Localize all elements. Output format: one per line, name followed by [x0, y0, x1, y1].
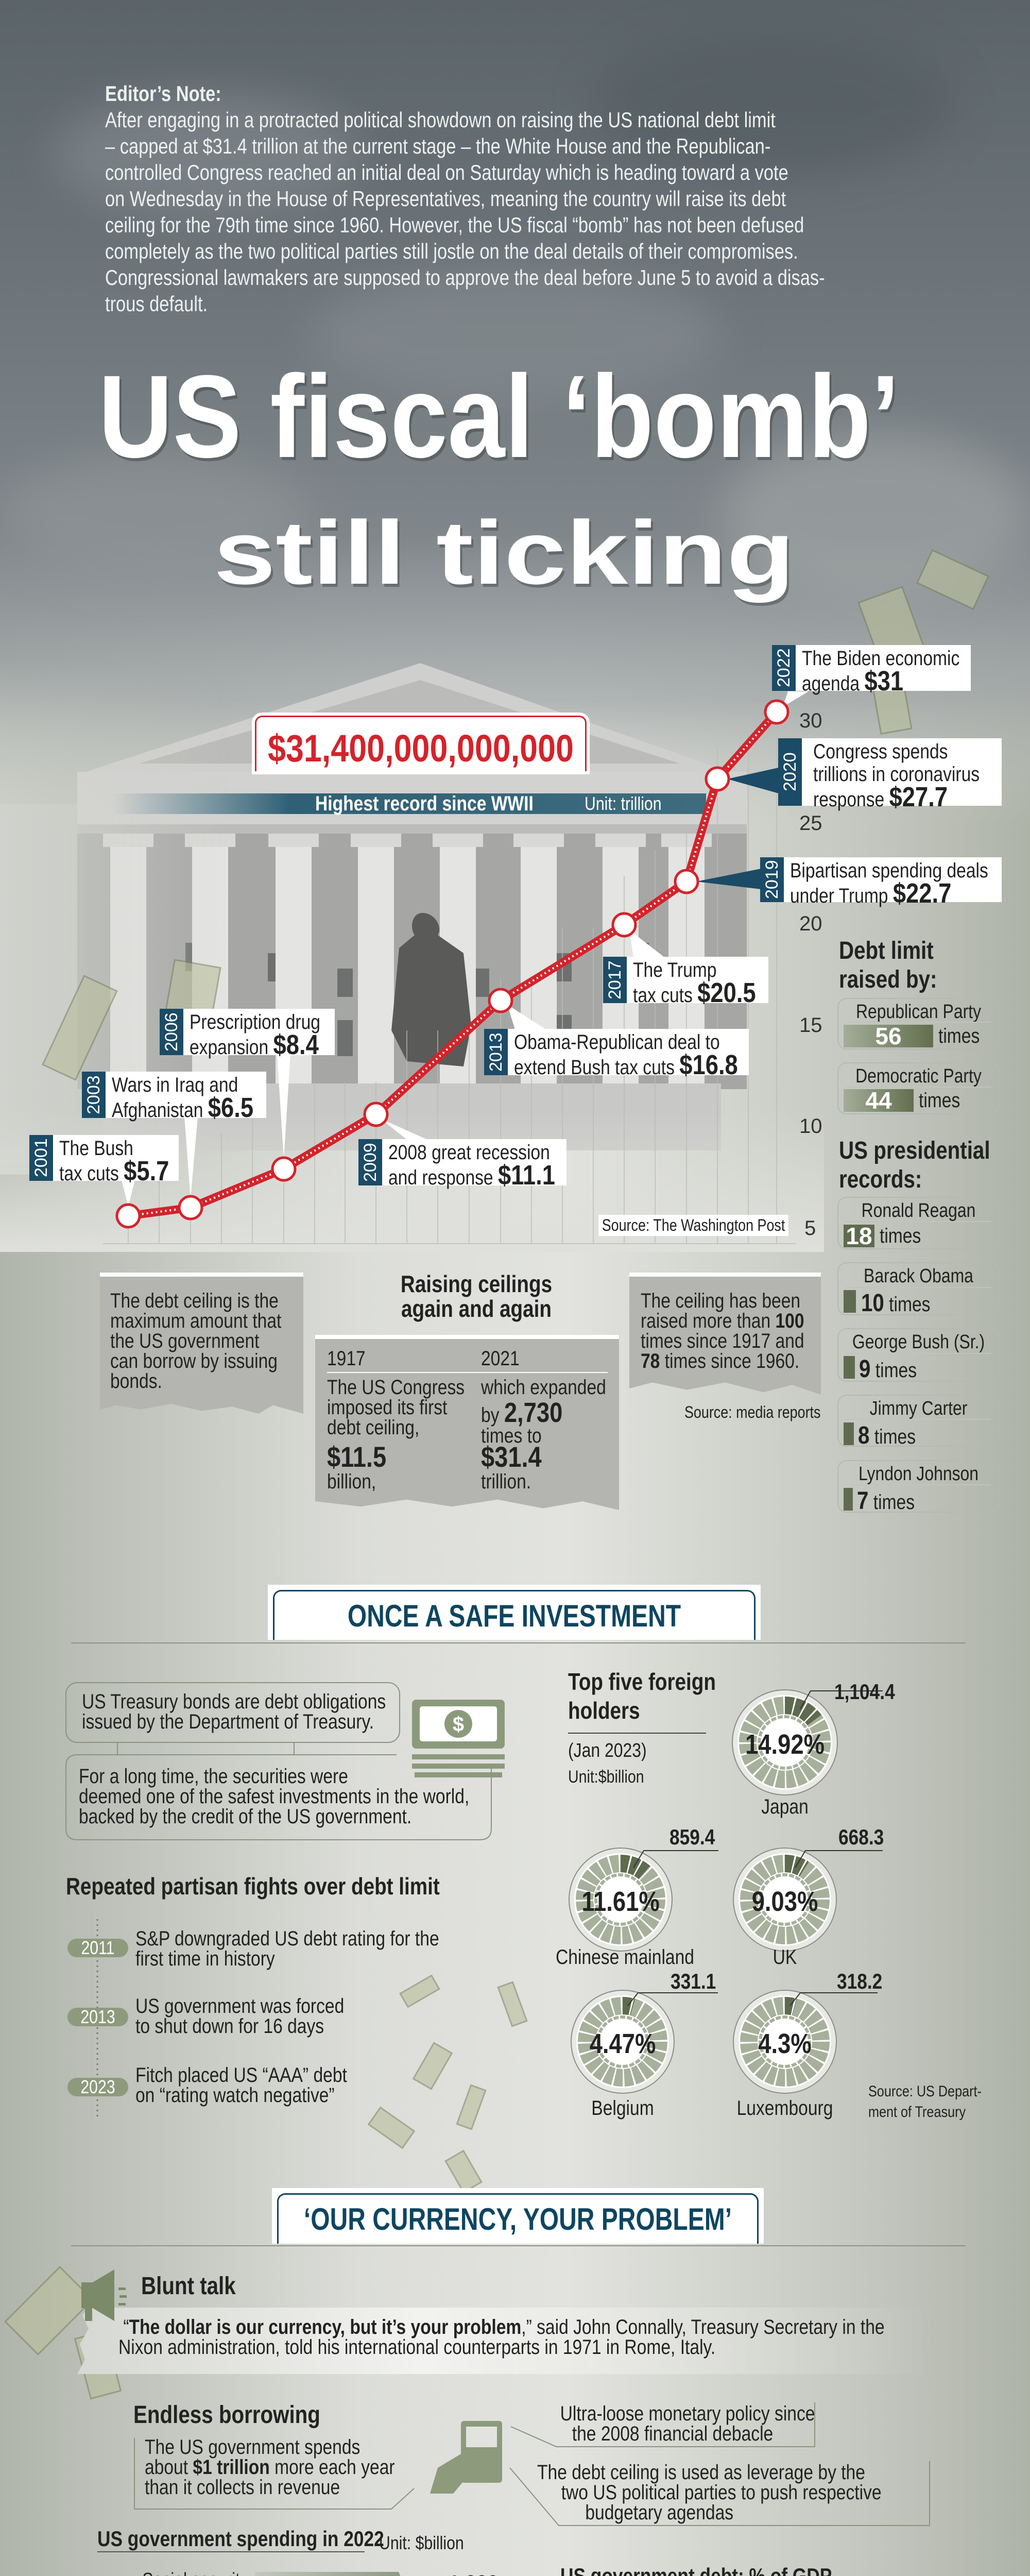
text: Unit: trillion — [585, 793, 662, 814]
label 2006: 2006 — [162, 1012, 181, 1052]
label 2017: The Trump — [633, 959, 716, 981]
label 2006: Prescription drug — [190, 1011, 320, 1033]
presidential heading — [839, 1137, 990, 1193]
label 2001: 2001 — [31, 1139, 51, 1177]
debt line chart — [117, 701, 788, 1227]
label 2019: Bipartisan spending deals — [790, 859, 988, 882]
icon: phone in hand — [430, 2421, 502, 2494]
chart grid — [103, 721, 796, 1244]
label 2019: under Trump $22.7 — [790, 878, 951, 909]
top five heading: Top five foreign — [568, 1668, 716, 1695]
label 2009: and response $11.1 — [388, 1160, 555, 1191]
text: to shut down for 16 days — [135, 2015, 324, 2038]
right note box: raised more than 100 — [641, 1310, 804, 1332]
bonds text: issued by the Department of Treasury. — [82, 1710, 374, 1733]
editor's note: on Wednesday in the House of Representatives, meaning the country will raise its debt — [105, 187, 786, 211]
leverage: budgetary agendas — [585, 2501, 733, 2524]
editor's note: – capped at $31.4 trillion at the current stage – the White House and the Republican- — [105, 134, 770, 158]
text: Chinese mainland — [556, 1946, 694, 1969]
quote text — [118, 2317, 885, 2358]
editor's note: controlled Congress reached an initial deal on Saturday which is heading toward a vote — [105, 160, 788, 184]
Johnson: 7 times — [857, 1487, 915, 1515]
label 2013 — [484, 1029, 749, 1075]
middle box 1917-2021 — [315, 1335, 619, 1510]
quote text: “The dollar is our currency, but it’s your problem,” said John Connally, Treasury Secretary in the — [123, 2316, 885, 2338]
donut: Luxembourg — [733, 1990, 878, 2093]
label 2001: tax cuts $5.7 — [59, 1156, 169, 1187]
debt limit heading: Debt limit — [839, 937, 934, 964]
ultra-loose — [560, 2404, 785, 2444]
jan 2023 — [568, 1740, 647, 1787]
text: Japan — [761, 1795, 809, 1818]
debt limit heading: raised by: — [839, 966, 937, 993]
Bush Sr — [837, 1328, 1000, 1382]
editor's note: Editor’s Note: — [105, 81, 221, 106]
label 2019: 2019 — [762, 860, 782, 899]
title — [98, 351, 902, 606]
Johnson: Lyndon Johnson — [859, 1463, 978, 1485]
jan 2023: (Jan 2023) — [568, 1740, 647, 1761]
timeline items: 2011 — [81, 1937, 115, 1958]
repeated fights heading: Repeated partisan fights over debt limit — [66, 1873, 440, 1900]
label 2020: 2020 — [780, 753, 800, 791]
y-axis labels: 10 — [799, 1115, 822, 1138]
section header: our currency — [272, 2188, 764, 2244]
blunt talk: Blunt talk — [141, 2273, 236, 2300]
label 2003: Wars in Iraq and — [112, 1074, 238, 1096]
teal band — [112, 793, 706, 814]
Democratic box — [837, 1062, 1000, 1114]
Republican box: Republican Party — [856, 1001, 981, 1023]
label 2019 — [760, 857, 1002, 902]
label 2001: The Bush — [59, 1137, 133, 1160]
quote text: Nixon administration, told his international counterparts in 1971 in Rome, Italy. — [118, 2336, 715, 2359]
Carter — [837, 1395, 1000, 1447]
ultra-loose: Ultra-loose monetary policy since — [560, 2402, 815, 2425]
note: debt ceiling definition — [100, 1273, 303, 1414]
text: than it collects in revenue — [145, 2476, 340, 2499]
editor's note: ceiling for the 79th time since 1960. However, the US fiscal “bomb” has not been defused — [105, 213, 804, 237]
jan 2023: Unit:$billion — [568, 1767, 644, 1787]
Democratic box: Democratic Party — [855, 1065, 982, 1087]
label 2009: 2008 great recession — [388, 1141, 550, 1164]
middle box 1917-2021: $31.4 — [481, 1440, 542, 1473]
middle box 1917-2021: 1917 — [327, 1347, 366, 1370]
note: debt ceiling definition: can borrow by issuing — [110, 1350, 278, 1372]
text: US government was forced — [135, 1995, 344, 2018]
Obama — [837, 1262, 1000, 1315]
Democratic box: times — [919, 1089, 960, 1112]
right note box: times since 1917 and — [641, 1330, 804, 1352]
middle box 1917-2021: which expanded — [481, 1376, 606, 1399]
presidential heading: US presidential — [839, 1137, 990, 1164]
spending heading: US government spending in 2022 — [97, 2527, 384, 2551]
middle box 1917-2021: by 2,730 — [481, 1397, 562, 1428]
note: debt ceiling definition: the US government — [110, 1330, 259, 1352]
label 2001 — [29, 1135, 179, 1181]
label 2017: tax cuts $20.5 — [633, 977, 756, 1008]
y-axis labels — [799, 709, 822, 1240]
middle box 1917-2021: 2021 — [481, 1347, 520, 1370]
right note box — [629, 1273, 821, 1395]
label 2003: 2003 — [84, 1075, 104, 1114]
middle box 1917-2021: times to — [481, 1425, 542, 1447]
text: 318.2 — [837, 1969, 882, 1993]
band text: Highest record since WWII — [315, 792, 534, 815]
Reagan: Ronald Reagan — [862, 1200, 975, 1222]
middle box 1917-2021: debt ceiling, — [327, 1416, 419, 1439]
text: 4.47% — [590, 2028, 656, 2059]
ultra-loose: the 2008 financial debacle — [572, 2422, 773, 2445]
safest text: backed by the credit of the US government. — [79, 1805, 411, 1828]
label 2022: The Biden economic — [802, 647, 959, 670]
note: debt ceiling definition: maximum amount that — [110, 1310, 281, 1332]
building illustration — [0, 659, 824, 1252]
section header: our currency: ‘OUR CURRENCY, YOUR PROBLEM’ — [304, 2202, 732, 2236]
Johnson — [837, 1460, 1000, 1513]
Republican box: 56 — [875, 1023, 902, 1049]
text: ment of Treasury — [868, 2104, 966, 2121]
text: Fitch placed US “AAA” debt — [135, 2064, 347, 2087]
label 2003 — [82, 1072, 266, 1118]
spending bars — [97, 2552, 440, 2576]
donut labels: 14.92% — [745, 1729, 825, 1760]
timeline dotted line and pills — [67, 1919, 128, 2120]
Carter: Jimmy Carter — [870, 1398, 967, 1419]
text: 2013 — [80, 2006, 115, 2027]
Obama: 10 times — [861, 1290, 930, 1317]
Carter: 8 times — [858, 1422, 916, 1449]
label 2017: 2017 — [605, 960, 625, 999]
text: Luxembourg — [737, 2097, 833, 2120]
debt limit heading — [839, 937, 937, 993]
Obama: Barack Obama — [864, 1265, 973, 1287]
label 2013: 2013 — [486, 1032, 506, 1072]
label 2022 — [772, 645, 971, 691]
Democratic box: 44 — [865, 1087, 892, 1114]
text: The US government spends — [145, 2436, 360, 2459]
safest text: deemed one of the safest investments in the world, — [79, 1785, 469, 1808]
text: 9.03% — [752, 1886, 818, 1917]
icon: money stack: $ — [453, 1713, 464, 1736]
label 2020: trillions in coronavirus — [813, 763, 980, 786]
raising ceilings title — [401, 1270, 552, 1322]
text: 2023 — [80, 2076, 115, 2097]
middle box 1917-2021: $11.5 — [327, 1440, 386, 1473]
label 2022: agenda $31 — [802, 666, 903, 697]
safest text: For a long time, the securities were — [79, 1765, 348, 1788]
text: S&P downgraded US debt rating for the — [135, 1927, 439, 1950]
editor's note — [105, 81, 825, 316]
note: debt ceiling definition: bonds. — [110, 1370, 162, 1393]
title: still ticking — [214, 503, 795, 603]
leverage: The debt ceiling is used as leverage by the — [537, 2461, 865, 2484]
label 2006: expansion $8.4 — [190, 1029, 319, 1060]
label 2006 — [160, 1009, 335, 1055]
chart source: Source: The Washington Post — [602, 1216, 785, 1234]
y-axis labels: 20 — [799, 912, 822, 935]
text: on “rating watch negative” — [135, 2084, 335, 2107]
endless borrowing box outlines — [134, 2402, 930, 2526]
note: debt ceiling definition: The debt ceiling is the — [110, 1290, 279, 1312]
editor's note: After engaging in a protracted political showdown on raising the US national debt limit — [105, 108, 776, 132]
editor's note: Congressional lawmakers are supposed to approve the deal before June 5 to avoid a disas- — [105, 265, 825, 290]
pointers — [122, 691, 809, 1207]
text: UK — [773, 1946, 797, 1969]
label 2013: extend Bush tax cuts $16.8 — [514, 1049, 738, 1080]
right note box: 78 times since 1960. — [641, 1350, 799, 1372]
label 2020: response $27.7 — [813, 782, 948, 812]
flying money — [5, 550, 988, 2399]
icon: money stack — [412, 1700, 505, 1777]
text: 4.3% — [758, 2028, 812, 2059]
y-axis labels: 30 — [799, 709, 822, 732]
donut: Chinese mainland — [569, 1848, 718, 1951]
Republican box: times — [938, 1025, 980, 1047]
presidential heading: records: — [839, 1166, 922, 1193]
text: 859.4 — [670, 1825, 715, 1849]
raising ceilings red arrow — [418, 1435, 460, 1479]
source media: Source: media reports — [684, 1403, 820, 1421]
top five heading: holders — [568, 1697, 640, 1724]
label 2013: Obama-Republican deal to — [514, 1031, 720, 1054]
raising ceilings title: again and again — [401, 1295, 552, 1322]
title: still ticking — [216, 506, 797, 606]
text: Unit: $billion — [379, 2532, 464, 2553]
middle box 1917-2021: billion, — [327, 1470, 376, 1493]
Reagan: 18 — [846, 1223, 872, 1249]
Bush Sr: 9 times — [859, 1355, 917, 1383]
text: 331.1 — [671, 1969, 716, 1993]
label 2022: 2022 — [774, 649, 794, 687]
donut: Belgium — [571, 1990, 718, 2093]
title: US fiscal ‘bomb’ — [100, 354, 902, 485]
y-axis labels: 5 — [804, 1217, 816, 1240]
label 2017 — [603, 957, 768, 1003]
Reagan: times — [880, 1225, 921, 1247]
text: Source: US Depart- — [868, 2083, 982, 2100]
label 2003: Afghanistan $6.5 — [112, 1092, 253, 1123]
text: 668.3 — [838, 1825, 884, 1849]
section header: once a safe investment: ONCE A SAFE INVESTMENT — [348, 1598, 681, 1633]
middle box 1917-2021: imposed its first — [327, 1396, 447, 1419]
text: 11.61% — [581, 1886, 660, 1917]
label 2009 — [358, 1139, 566, 1185]
text: Belgium — [591, 2097, 654, 2120]
icon: megaphone — [81, 2269, 127, 2321]
y-axis labels: 25 — [799, 812, 822, 835]
safest text — [79, 1765, 469, 1828]
middle box 1917-2021: trillion. — [481, 1470, 531, 1493]
editor's note: completely as the two political parties still jostle on the deal details of their compromises. — [105, 239, 798, 263]
label 2020: Congress spends — [813, 740, 948, 763]
top five heading — [568, 1668, 716, 1724]
bonds text — [82, 1690, 386, 1733]
middle box 1917-2021: The US Congress — [327, 1376, 465, 1399]
bond box outlines — [66, 1683, 491, 1840]
leverage — [537, 2463, 882, 2523]
Bush Sr: George Bush (Sr.) — [852, 1331, 985, 1353]
raising ceilings title: Raising ceilings — [401, 1270, 552, 1297]
text: about $1 trillion more each year — [145, 2456, 395, 2479]
editor's note: trous default. — [105, 292, 208, 316]
y-axis labels: 15 — [799, 1014, 822, 1037]
leverage: two US political parties to push respective — [561, 2481, 882, 2504]
label 2020 — [778, 738, 1002, 806]
title: US fiscal ‘bomb’ — [98, 351, 900, 482]
section header: once a safe investment — [268, 1585, 761, 1640]
text: 1,104.4 — [834, 1680, 895, 1704]
donut: UK — [733, 1848, 883, 1951]
bonds text: US Treasury bonds are debt obligations — [82, 1690, 386, 1713]
donut: Japan — [732, 1690, 883, 1795]
endless borrowing: Endless borrowing — [133, 2401, 320, 2429]
text: first time in history — [135, 1947, 275, 1970]
Republican box — [837, 998, 1000, 1049]
Reagan — [837, 1197, 1000, 1249]
label 2009: 2009 — [360, 1143, 380, 1182]
right note box: The ceiling has been — [641, 1290, 800, 1312]
